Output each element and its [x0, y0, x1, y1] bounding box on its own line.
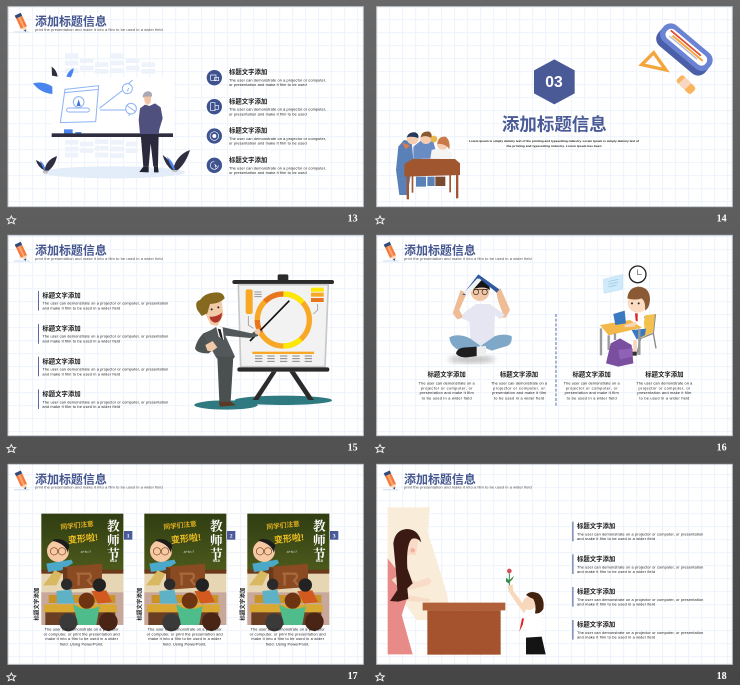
- slide panel: [377, 7, 732, 207]
- card 3: [239, 514, 338, 647]
- caption: The user can demonstrate on a projector: [148, 627, 222, 631]
- caption: The user can demonstrate on a projector: [251, 627, 325, 631]
- number badge: 3: [333, 533, 336, 539]
- text list: [572, 521, 703, 640]
- poster: a+b=?: [287, 550, 297, 554]
- slide 14: [376, 7, 732, 225]
- icon: pencil: [14, 13, 29, 33]
- column 3: The user can demonstrate on a: [564, 381, 621, 385]
- vertical heading: 标题文字添加: [136, 587, 144, 621]
- item 3: The user can demonstrate on a projector or computer, or presentation: [577, 598, 703, 602]
- column 4: presentation and make it film: [637, 391, 691, 395]
- item 4: [38, 389, 168, 409]
- card 2: [136, 514, 235, 647]
- item 3: 标题文字添加: [577, 587, 615, 596]
- icon: star: [376, 445, 384, 452]
- poster: 同学们注意: [60, 519, 94, 531]
- item 2: [207, 96, 326, 116]
- item 1: [572, 521, 703, 541]
- item 3: [572, 587, 703, 607]
- poster: 教: [210, 518, 223, 533]
- item 3: and make it film to be used in a wider field: [42, 372, 120, 376]
- poster: [144, 514, 226, 631]
- poster: 节: [313, 546, 326, 561]
- item 3: The user can demonstrate on a projector or computer, or presentation: [42, 368, 168, 372]
- item 2: 标题文字添加: [229, 96, 267, 105]
- item 3: 标题文字添加: [229, 126, 267, 135]
- caption: or computer, or print the presentation and: [147, 632, 223, 636]
- column 3: projector or computer, or: [566, 386, 618, 390]
- column 1: to be used in a wider field: [422, 396, 472, 400]
- item 1: 标题文字添加: [42, 291, 81, 300]
- page number: 17: [348, 671, 358, 682]
- item 2: [38, 324, 168, 344]
- item 4: and make it film to be used in a wider field: [42, 405, 120, 409]
- column 3: to be used in a wider field: [567, 396, 617, 400]
- title: 添加标题信息: [35, 471, 107, 486]
- title: 添加标题信息: [404, 243, 476, 258]
- column 1: The user can demonstrate on a: [419, 381, 476, 385]
- icon: star: [7, 216, 16, 224]
- icon: star: [376, 216, 384, 224]
- poster: 节: [107, 546, 120, 561]
- header: [14, 470, 163, 491]
- page number: 14: [717, 214, 727, 225]
- column 3: presentation and make it film: [565, 391, 619, 395]
- item 2: and make it film to be used in a wider field: [42, 339, 120, 343]
- vertical heading: 标题文字添加: [33, 587, 41, 621]
- item 4: The user can demonstrate on a projector or computer, or presentation: [42, 400, 168, 404]
- icon: star: [7, 673, 16, 681]
- item 2: 标题文字添加: [577, 554, 615, 563]
- illustration: presenter with chart: [194, 274, 334, 410]
- poster: 教: [107, 518, 120, 533]
- item 3: [38, 356, 168, 376]
- item 1: 标题文字添加: [229, 67, 267, 76]
- description: the printing and typesetting industry. Lorem Ipsum has been: [506, 144, 602, 148]
- description: Lorem Ipsum is simply dummy text of the printing and typesetting industry. Lorem Ipsum is simply dummy text of: [469, 139, 640, 143]
- caption: or computer, or print the presentation and: [250, 632, 326, 636]
- page number: 15: [348, 443, 358, 454]
- poster: 师: [210, 532, 223, 547]
- slide panel: [8, 464, 363, 664]
- slide 15: [7, 235, 363, 454]
- vertical heading: 标题文字添加: [239, 587, 247, 621]
- poster: 师: [313, 532, 326, 547]
- poster: 变形啦!: [170, 531, 201, 545]
- slide panel: [8, 7, 363, 207]
- caption: make it into a film to be used in a wider: [251, 637, 325, 641]
- column 2: The user can demonstrate on a: [491, 381, 548, 385]
- slide panel: [377, 235, 732, 436]
- page number: 18: [717, 671, 727, 682]
- title: 添加标题信息: [502, 114, 607, 134]
- item 1: 标题文字添加: [577, 521, 615, 530]
- caption: [147, 627, 223, 647]
- header: [383, 470, 532, 491]
- item 4: The user can demonstrate on a projector or computer, or presentation: [577, 631, 703, 635]
- caption: The user can demonstrate on a projector: [45, 627, 119, 631]
- column 2: [491, 370, 548, 400]
- icon: pencil: [383, 470, 398, 491]
- item 1: [207, 67, 326, 87]
- list: [207, 67, 326, 175]
- item 4: 标题文字添加: [229, 155, 267, 164]
- item 3: 标题文字添加: [42, 356, 81, 365]
- caption: field. Using PowerPoint,: [163, 643, 206, 647]
- item 4: The user can demonstrate on a projector or computer,: [229, 166, 326, 170]
- item 1: [38, 291, 168, 311]
- item 4: [572, 620, 703, 640]
- subtitle: print the presentation and make it into a film to be used in a wider field: [404, 256, 532, 261]
- header: [14, 242, 163, 262]
- item 1: The user can demonstrate on a projector or computer,: [229, 78, 326, 82]
- subtitle: print the presentation and make it into a film to be used in a wider field: [35, 27, 163, 32]
- poster: 9/10: [110, 559, 117, 563]
- header: [383, 242, 532, 262]
- item 2: The user can demonstrate on a projector or computer,: [229, 108, 326, 112]
- item 3: and make it film to be used in a wider field: [577, 603, 655, 607]
- caption: [250, 627, 326, 647]
- poster: 同学们注意: [163, 519, 197, 531]
- column 1: 标题文字添加: [428, 370, 466, 379]
- slide panel: [8, 235, 363, 436]
- column 2: 标题文字添加: [500, 370, 538, 379]
- page number: 16: [717, 443, 727, 454]
- column 1: projector or computer, or: [421, 386, 473, 390]
- poster: 9/10: [316, 559, 323, 563]
- item 3: The user can demonstrate on a projector or computer,: [229, 137, 326, 141]
- caption: [44, 627, 120, 647]
- title: 添加标题信息: [35, 14, 107, 29]
- item 3: or presentation and make it film to be used: [229, 142, 307, 146]
- poster: 变形啦!: [273, 531, 304, 545]
- item 4: [207, 155, 326, 175]
- poster: 同学们注意: [266, 519, 300, 531]
- poster: 师: [107, 532, 120, 547]
- slide 17: [7, 464, 363, 682]
- item 4: 标题文字添加: [42, 389, 81, 398]
- divider: dashed: [554, 314, 557, 407]
- item 1: or presentation and make it film to be used: [229, 83, 307, 87]
- illustration: man at whiteboard: [33, 53, 190, 178]
- item 1: The user can demonstrate on a projector or computer, or presentation: [577, 532, 703, 536]
- column 3: [564, 370, 621, 400]
- column 4: [636, 370, 693, 400]
- slide 16: [376, 235, 732, 454]
- number badge: 1: [127, 533, 130, 539]
- icon: pencil: [14, 470, 29, 491]
- icon: pencil: [14, 242, 29, 262]
- poster: a+b=?: [184, 550, 194, 554]
- column 4: projector or computer, or: [638, 386, 691, 390]
- number badge: 2: [230, 533, 233, 539]
- slide 13: [7, 7, 363, 225]
- item 3: [207, 126, 326, 146]
- caption: field. Using PowerPoint,: [60, 643, 103, 647]
- header: [14, 13, 163, 33]
- poster: 变形啦!: [67, 531, 98, 545]
- item 2: 标题文字添加: [42, 324, 81, 333]
- item 1: The user can demonstrate on a projector or computer, or presentation: [42, 302, 168, 306]
- card 1: [33, 514, 132, 647]
- illustration: boy with book on head: [448, 274, 512, 363]
- icon: star: [376, 673, 384, 681]
- column 1: [419, 370, 476, 400]
- description: [469, 139, 640, 148]
- poster: 教: [313, 518, 326, 533]
- title: 添加标题信息: [404, 471, 476, 486]
- item 4: and make it film to be used in a wider field: [577, 636, 655, 640]
- item 1: and make it film to be used in a wider field: [577, 537, 655, 541]
- subtitle: print the presentation and make it into a film to be used in a wider field: [404, 485, 532, 490]
- icon: star: [7, 445, 16, 452]
- title: 添加标题信息: [35, 243, 107, 258]
- illustration: teacher and student with flower: [388, 507, 546, 655]
- poster: [247, 514, 329, 631]
- item 4: 标题文字添加: [577, 620, 615, 629]
- slide 18: [376, 464, 732, 682]
- illustration: pencil case: [642, 20, 716, 95]
- caption: or computer, or print the presentation and: [44, 632, 120, 636]
- poster: a+b=?: [81, 550, 91, 554]
- caption: make it into a film to be used in a wider: [148, 637, 222, 641]
- poster: [41, 514, 123, 631]
- item 2: The user can demonstrate on a projector or computer, or presentation: [577, 565, 703, 569]
- illustration: students at desk: [396, 132, 460, 199]
- column 1: presentation and make it film: [420, 391, 474, 395]
- column 3: 标题文字添加: [573, 370, 611, 379]
- text list: [38, 291, 168, 409]
- caption: make it into a film to be used in a wider: [45, 637, 119, 641]
- poster: 节: [210, 546, 223, 561]
- caption: field. Using PowerPoint,: [266, 643, 309, 647]
- column 4: The user can demonstrate on a: [636, 381, 693, 385]
- item 4: or presentation and make it film to be used: [229, 171, 307, 175]
- item 2: [572, 554, 703, 574]
- slide panel: [377, 464, 732, 664]
- column 4: 标题文字添加: [645, 370, 683, 379]
- column 2: presentation and make it film: [492, 391, 546, 395]
- poster: 9/10: [213, 559, 220, 563]
- subtitle: print the presentation and make it into a film to be used in a wider field: [35, 485, 163, 490]
- column 2: projector or computer, or: [493, 386, 546, 390]
- item 2: The user can demonstrate on a projector or computer, or presentation: [42, 335, 168, 339]
- hexagon number: 03: [545, 74, 563, 91]
- icon: pencil: [383, 242, 398, 262]
- column 4: to be used in a wider field: [639, 396, 689, 400]
- subtitle: print the presentation and make it into a film to be used in a wider field: [35, 256, 163, 261]
- item 2: and make it film to be used in a wider field: [577, 570, 655, 574]
- illustration: boy reading: [600, 266, 656, 367]
- page number: 13: [348, 214, 358, 225]
- hexagon number: [534, 59, 575, 104]
- item 2: or presentation and make it film to be used: [229, 112, 307, 116]
- column 2: to be used in a wider field: [494, 396, 544, 400]
- item 1: and make it film to be used in a wider field: [42, 306, 120, 310]
